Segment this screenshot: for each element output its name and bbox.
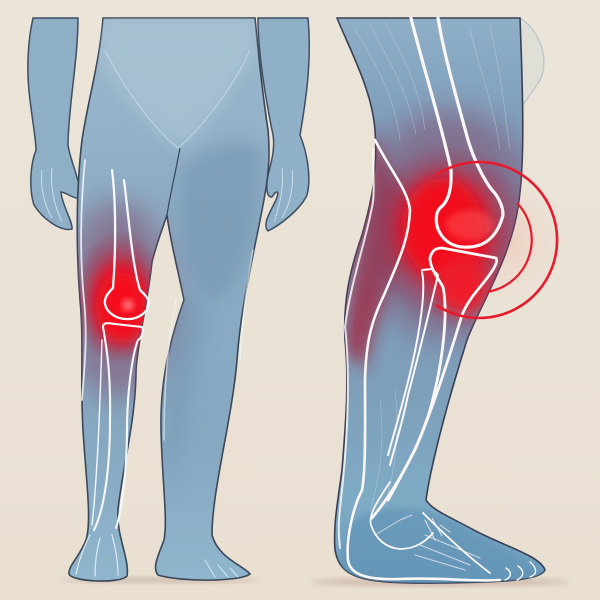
- hip crease lines: [105, 50, 250, 148]
- front figure: [28, 18, 309, 581]
- femur front: [105, 170, 149, 319]
- right foot toes: [205, 560, 238, 577]
- shading: inner leg: [161, 295, 200, 454]
- shading: rear strip: [345, 125, 410, 370]
- floor shadow right: [310, 578, 570, 586]
- icon: left arm and hand: [28, 18, 81, 229]
- front of calf line: [348, 140, 500, 580]
- crotch crease: [167, 148, 180, 215]
- purple haze: side leg: [360, 110, 540, 340]
- shading: right leg: [180, 142, 262, 300]
- icon: right arm and hand: [258, 18, 309, 231]
- front knee highlight: [122, 299, 134, 311]
- foot bones: [76, 535, 118, 576]
- leg streaks: [355, 22, 510, 510]
- white outlines side figure: [339, 18, 536, 580]
- inner knee shine: [446, 210, 494, 240]
- side figure: [335, 18, 575, 590]
- ankle bone: [370, 482, 433, 549]
- floor shadow: [60, 577, 260, 583]
- foot lines: [423, 513, 490, 573]
- halo: behind knee: [435, 170, 575, 310]
- red pain circle: outer: [436, 162, 557, 318]
- back edge light: [339, 150, 374, 548]
- femur side: [411, 18, 503, 247]
- red pain arc: inner: [487, 203, 532, 292]
- foot fill: [338, 508, 544, 584]
- fibula: [390, 269, 438, 465]
- red glow: front knee: [78, 234, 153, 362]
- finger lines: [41, 168, 293, 222]
- torso and legs: [69, 18, 269, 581]
- tibia front: [103, 323, 143, 528]
- leg: [335, 18, 545, 583]
- red glow: side knee: [379, 148, 518, 315]
- shading: hips: [100, 20, 255, 148]
- purple haze: front leg: [63, 200, 173, 400]
- tibia side: [388, 248, 497, 500]
- buttock: [520, 18, 544, 110]
- white outlines front figure: [76, 160, 253, 577]
